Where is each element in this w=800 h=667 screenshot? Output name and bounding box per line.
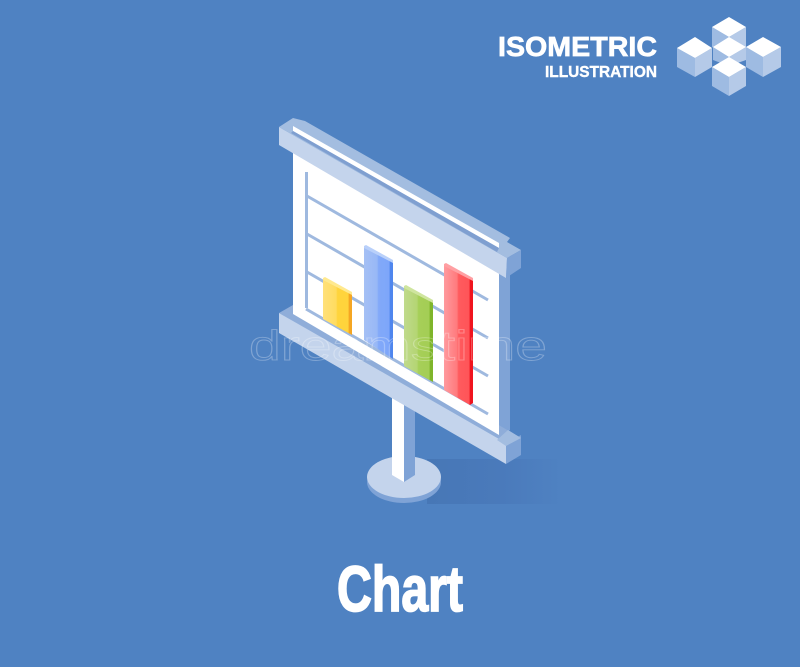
title: Chart	[337, 553, 463, 625]
green bar	[404, 285, 433, 382]
red bar	[444, 263, 473, 405]
board side edge	[499, 256, 510, 436]
yellow bar	[323, 277, 352, 335]
logo text: ISOMETRIC	[498, 31, 657, 62]
logo text	[498, 31, 657, 81]
logo cubes icon	[677, 17, 781, 96]
stand base	[367, 456, 441, 503]
stand pole	[392, 395, 415, 482]
shadow on floor	[427, 459, 562, 504]
watermark: dreamstime	[249, 322, 547, 369]
logo text: ILLUSTRATION	[545, 64, 657, 81]
chart grid lines	[306, 172, 488, 414]
top rail	[279, 118, 521, 278]
blue bar	[364, 245, 393, 359]
bar chart	[323, 245, 473, 405]
bottom rail	[279, 305, 521, 464]
board white panel	[293, 150, 499, 435]
